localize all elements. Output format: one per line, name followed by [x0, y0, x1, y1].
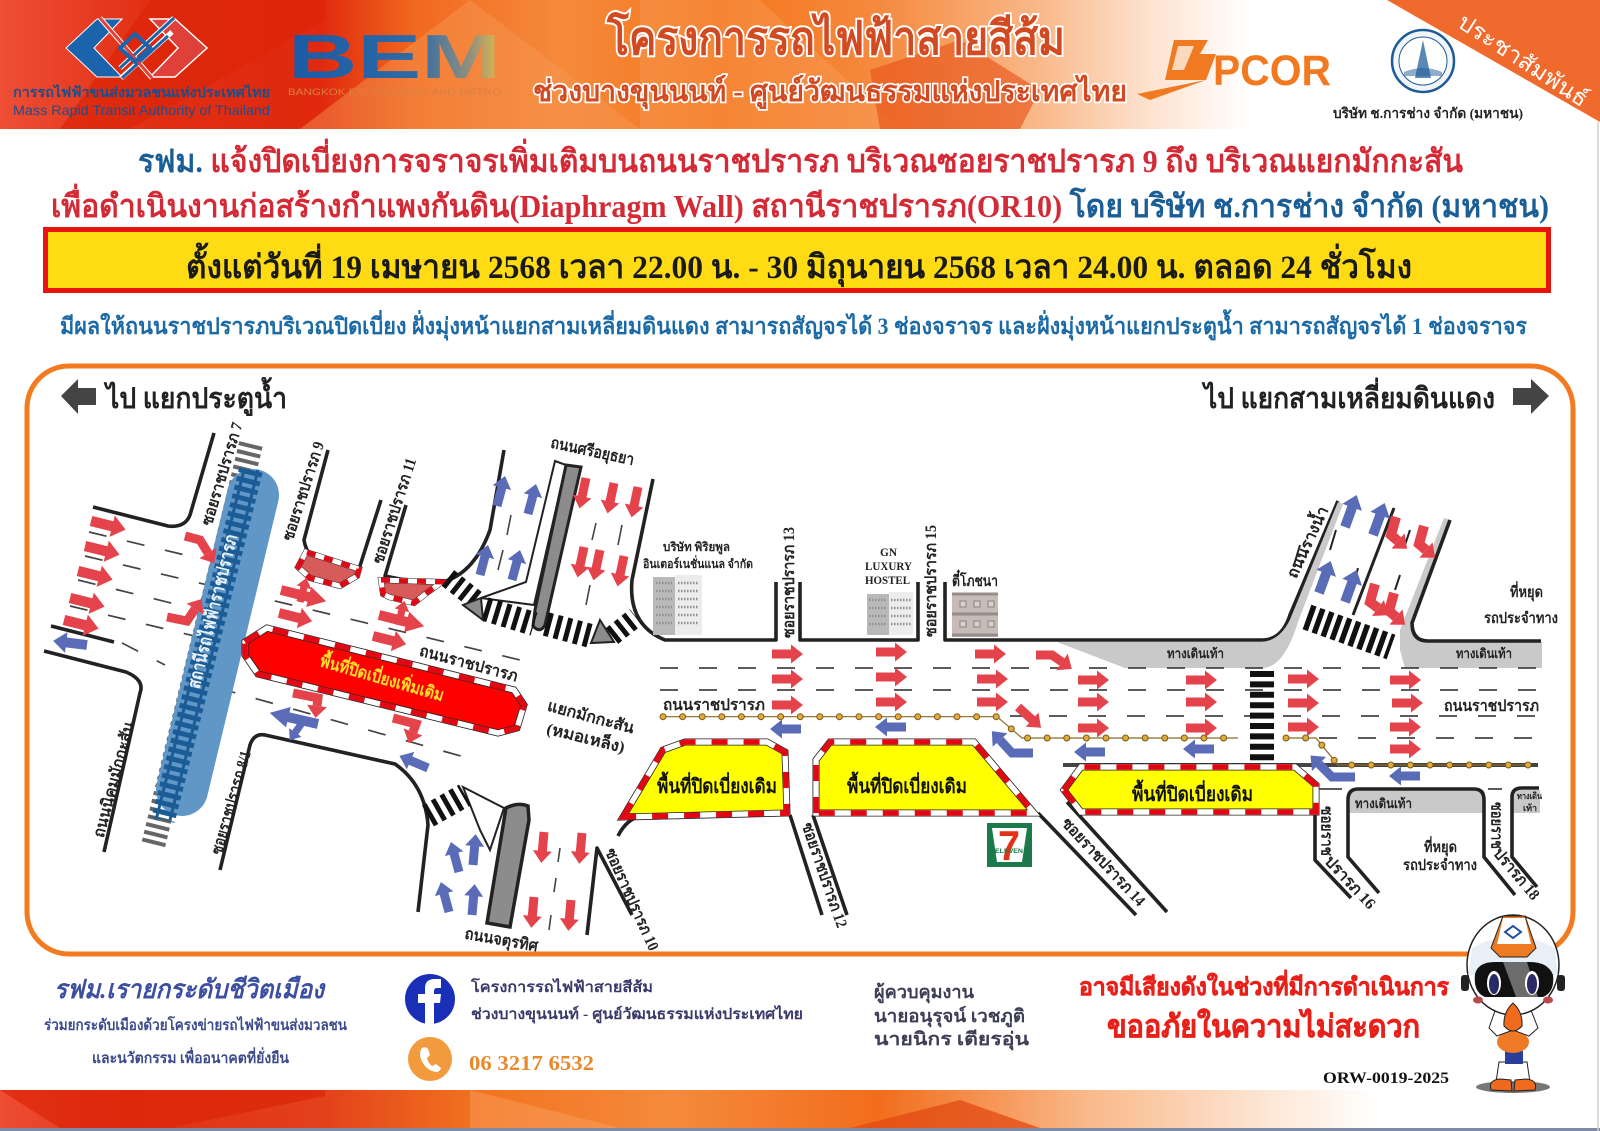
- map labels: ซอยราชปรารภ 14: [1058, 815, 1148, 910]
- closure zone: additional: พื้นที่ปิดเบี่ยงเพิ่มเติม: [318, 648, 447, 705]
- map labels: ถนนราชปรารภ: [663, 697, 765, 714]
- title: โครงการรถไฟฟ้าสายสีส้ม: [606, 11, 1065, 64]
- buildings: [653, 575, 998, 637]
- facebook text: โครงการรถไฟฟ้าสายสีส้ม: [470, 977, 653, 996]
- map labels: LUXURY: [865, 559, 912, 573]
- footer slogan: รฟม.เรายกระดับชีวิตเมือง: [54, 975, 326, 1004]
- map: main road blue arrows: [770, 718, 1420, 786]
- map labels: เท้า: [1523, 803, 1537, 813]
- closure zone: existing 1: พื้นที่ปิดเบี่ยงเดิม: [657, 771, 777, 798]
- closure zone: existing 2: [816, 742, 1034, 813]
- map labels: ซอยราชปรารภ 8/1: [209, 749, 255, 857]
- logo: BEM: [288, 23, 501, 97]
- heading line 2: เพื่อดำเนินงานก่อสร้างกำแพงกันดิน(Diaphragm Wall) สถานีราชปรารภ(OR10) โดย บริษัท ช.การช่าง จำกัด (มหาชน): [51, 183, 1549, 224]
- heading line 1: รฟม. แจ้งปิดเบี่ยงการจราจรเพิ่มเติมบนถนนราชปรารภ บริเวณซอยราชปรารภ 9 ถึง บริเวณแยกมักกะสัน: [138, 138, 1463, 179]
- map labels: ปรารภ 18: [1490, 845, 1543, 904]
- logo: MRTA: การรถไฟฟ้าขนส่งมวลชนแห่งประเทศไทย: [13, 83, 270, 101]
- map labels: ถนนจตุรทิศ: [463, 925, 540, 956]
- map labels: ตี๋โภชนา: [952, 569, 998, 590]
- map: orange line alignment: [663, 717, 1531, 765]
- footer slogan: [44, 975, 348, 1067]
- map labels: ถนนรางน้ำ: [1280, 502, 1332, 581]
- map labels: บริษัท พิริยพูล: [663, 540, 730, 555]
- direction: left: ไป แยกประตูน้ำ: [103, 376, 287, 416]
- logo: CH Karnchang: [1333, 30, 1523, 122]
- mascot: [1461, 915, 1565, 1093]
- map: side streets: [790, 788, 1539, 915]
- map: Chaturathit road: [428, 787, 632, 935]
- closure zone: existing 1: [618, 742, 787, 836]
- closure zone: existing 3: พื้นที่ปิดเบี่ยงเดิม: [1132, 779, 1253, 806]
- supervisors: นายนิกร เตียรอุ่น: [874, 1029, 1030, 1051]
- small closure: soi 9: [298, 552, 359, 586]
- icon: 7-Eleven: [987, 822, 1032, 869]
- apology message: อาจมีเสียงดังในช่วงที่มีการดำเนินการ: [1079, 969, 1449, 1001]
- logo: CH Karnchang: บริษัท ช.การช่าง จำกัด (มหาชน): [1333, 106, 1523, 122]
- footer slogan: และนวัตกรรม เพื่ออนาคตที่ยั่งยืน: [92, 1047, 290, 1067]
- map labels: ทางเดินเท้า: [1167, 646, 1224, 661]
- map labels: ที่หยุด: [1510, 581, 1543, 602]
- map labels: รถประจำทาง: [1484, 610, 1558, 627]
- map: main road red arrows: [772, 642, 1423, 758]
- apology message: [1079, 969, 1449, 1044]
- small closure: soi 11: [381, 580, 442, 603]
- map: Rang Nam road arrows: [1309, 491, 1426, 617]
- map labels: ซอยราชปรารภ 13: [781, 527, 798, 638]
- facebook text: ช่วงบางขุนนนท์ - ศูนย์วัฒนธรรมแห่งประเทศไทย: [471, 1004, 803, 1024]
- map labels: อินเตอร์เนชั่นแนล จำกัด: [643, 555, 753, 571]
- closure zone: additional: [245, 628, 524, 733]
- map labels: ถนนศรีอยุธยา: [549, 433, 636, 470]
- document code: ORW-0019-2025: [1323, 1070, 1449, 1087]
- map: railway and station: [153, 444, 258, 846]
- logo: MRTA: [13, 18, 270, 118]
- map labels: ซอยราชปรารภ 7: [199, 421, 246, 528]
- map labels: ซอยราช: [1317, 806, 1334, 856]
- footer slogan: ร่วมยกระดับเมืองด้วยโครงข่ายรถไฟฟ้าขนส่งมวลชน: [44, 1015, 348, 1034]
- icon: 7-Eleven: 7: [998, 822, 1020, 869]
- map labels: (หมอเหล็ง): [545, 717, 627, 757]
- date banner: [46, 230, 1548, 290]
- map: left junction roads: [44, 433, 1338, 912]
- header banner: [0, 0, 1600, 129]
- map labels: ปรารภ 16: [1321, 853, 1378, 913]
- map labels: ถนนนิคมมักกะสัน: [90, 720, 138, 839]
- title: ช่วงบางขุนนนท์ - ศูนย์วัฒนธรรมแห่งประเทศไทย: [533, 74, 1127, 109]
- corner ribbon label: ประชาสัมพันธ์: [1453, 8, 1593, 112]
- logo: PCOR: [1137, 40, 1331, 100]
- map labels: ทางเดิน: [1517, 791, 1543, 801]
- page edge line: [1597, 122, 1599, 1131]
- phone number: 06 3217 6532: [469, 1051, 594, 1075]
- map: Si Ayutthaya road: [448, 461, 647, 643]
- footer band: [0, 1090, 1600, 1131]
- map labels: ถนนราชปรารภ: [1444, 698, 1539, 715]
- logo: MRTA: Mass Rapid Transit Authority of Thailand: [13, 102, 270, 118]
- map labels: รถประจำทาง: [1403, 857, 1477, 874]
- facebook text: [470, 977, 803, 1024]
- icon: phone: [408, 1037, 452, 1081]
- map labels: แยกมักกะสัน: [546, 697, 636, 737]
- impact note: มีผลให้ถนนราชปรารภบริเวณปิดเบี่ยง ฝั่งมุ่งหน้าแยกสามเหลี่ยมดินแดง สามารถสัญจรได้ 3 ช่องจราจร และฝั่งมุ่งหน้าแยกประตูน้ำ สามารถสัญจรได้ 1 ช่องจราจร: [60, 309, 1528, 341]
- map labels: ถนนราชปรารภ: [418, 643, 519, 685]
- icon: 7-Eleven: ELEVEN: [995, 849, 1023, 855]
- closure zone: existing 3: [1064, 767, 1316, 812]
- supervisors: [874, 982, 1030, 1051]
- direction: right: ไป แยกสามเหลี่ยมดินแดง: [1201, 377, 1495, 415]
- map labels: ที่หยุด: [1424, 836, 1457, 857]
- closure zone: existing 2: พื้นที่ปิดเบี่ยงเดิม: [847, 771, 967, 798]
- map labels: ซอยราชปรารภ 10: [601, 846, 662, 953]
- logo: BEM: BANGKOK EXPRESSWAY AND METRO: [288, 87, 501, 97]
- map: Rajprarop road lanes: [660, 508, 1541, 765]
- logo: PCOR: PCOR: [1213, 47, 1331, 95]
- map: railway and station: สถานีรถไฟฟ้าราชปรารภ: [183, 532, 241, 690]
- supervisors: นายอนุรุจน์ เวชภูติ: [874, 1005, 1025, 1028]
- title: [533, 11, 1127, 109]
- logo: BEM: BEM: [288, 23, 501, 92]
- map labels: ซอยราช: [1487, 802, 1504, 849]
- map: sidewalks: [1057, 502, 1542, 813]
- map labels: ทางเดินเท้า: [1355, 796, 1412, 811]
- apology message: ขออภัยในความไม่สะดวก: [1107, 1008, 1420, 1044]
- map labels: [90, 421, 1558, 956]
- map labels: HOSTEL: [865, 573, 910, 587]
- direction: left: [61, 376, 287, 416]
- map labels: ซอยราชปรารภ 9: [280, 440, 328, 543]
- icon: facebook: [405, 974, 455, 1024]
- supervisors: ผู้ควบคุมงาน: [874, 982, 975, 1004]
- panel: traffic map frame: [27, 366, 1573, 954]
- map labels: ซอยราชปรารภ 15: [923, 525, 940, 637]
- map: left junction arrows: [52, 510, 432, 777]
- map labels: ทางเดินเท้า: [1456, 646, 1512, 661]
- map labels: ซอยราชปรารภ 11: [370, 456, 420, 566]
- map labels: GN: [880, 545, 897, 559]
- map labels: ซอยราชปรารภ 12: [798, 821, 850, 930]
- date banner: ตั้งแต่วันที่ 19 เมษายน 2568 เวลา 22.00 น. - 30 มิถุนายน 2568 เวลา 24.00 น. ตลอด 24 ชั่วโมง: [186, 242, 1412, 288]
